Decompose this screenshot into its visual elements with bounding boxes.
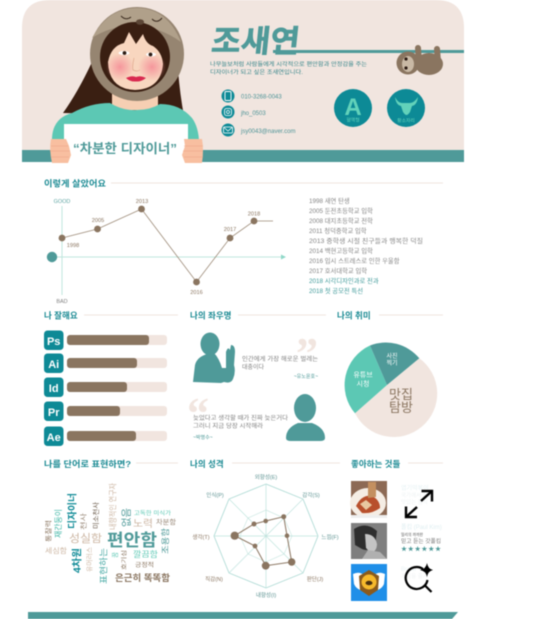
chart: word cloud: 편안함 (107, 531, 157, 550)
quote 2: ~박명수~ (193, 434, 213, 441)
chart: life line graph: 1998 (67, 243, 79, 249)
chart: word cloud: 노력 (133, 518, 153, 530)
skill: After Effects: Ae (47, 432, 61, 444)
heading: hobbies (337, 310, 443, 320)
chart: life line graph: GOOD (54, 199, 70, 205)
quote 2 (187, 389, 325, 441)
icon: sparkle search (406, 563, 433, 592)
quote 1: 대충이다 (242, 363, 265, 371)
chart: word cloud: 조용함 (161, 527, 170, 554)
chart: life line graph: 2005 (92, 218, 104, 224)
chart: life line graph: 2016 (190, 290, 203, 296)
chart: hobbies pie (345, 343, 437, 437)
text block: chronology list: 2017 호서대학교 입학 (309, 266, 367, 275)
text block: chronology list: 2018 시각디자인과로 전과 (309, 276, 379, 285)
quote 2: “ (187, 389, 209, 438)
text block: chronology list (309, 196, 423, 295)
chart: word cloud: 디자이너 (66, 493, 78, 529)
chart: word cloud: 표현하는 (98, 548, 108, 584)
chart: hobbies pie: 탐방 (389, 400, 413, 415)
favourite 3: hidden caption (401, 567, 428, 580)
heading: personality: 나의 성격 (190, 459, 224, 469)
chart: hobbies pie: 유튜브 (353, 371, 373, 379)
favourite 3: hidden caption: Brawl (401, 567, 416, 573)
chart: word cloud: 고독한 미식가 (134, 509, 171, 517)
favourite 2: caption: 폴킴 (Paul Kim) (401, 523, 442, 531)
chart: software skill bars (44, 330, 167, 446)
icon: person silhouette (286, 394, 325, 441)
intro text: 나무늘보처럼 사람들에게 시각적으로 편안함과 안정감을 주는 (210, 60, 367, 68)
heading: skills: 나 잘해요 (44, 310, 78, 320)
chart: life line graph (47, 199, 286, 305)
heading: life graph: 이렇게 살았어요 (44, 178, 106, 188)
chart: personality radar: 인식(P) (206, 491, 224, 499)
text block: chronology list: 1998 새연 탄생 (309, 196, 350, 205)
chart: word cloud: 재간둥이 (53, 509, 63, 538)
favourite 2: caption: ★★★★★★ (401, 546, 441, 553)
chart: word cloud: 미소천사 (91, 502, 100, 529)
heading: hobbies: 나의 취미 (337, 310, 371, 320)
chart: personality radar: 생각(T) (192, 533, 210, 541)
skill: Premiere: Pr (48, 407, 60, 419)
icon: hanging sloth (396, 48, 443, 75)
chart: word cloud: 내향적인 연구자 (108, 482, 118, 530)
instagram handle: jho_0503 (240, 111, 266, 117)
chart: word cloud: 없음 (120, 508, 133, 527)
chart: life line graph: 2013 (136, 199, 148, 205)
favourite 2: caption (401, 523, 442, 553)
favourite 1: food photo (350, 481, 387, 518)
text block: chronology list: 2018 첫 공모전 특선 (309, 286, 363, 295)
chart: word cloud: 유머러스 (84, 547, 94, 572)
heading: words (44, 459, 178, 469)
chart: word cloud: 긍정적 (135, 562, 154, 569)
chart: hobbies pie: 사진 (386, 352, 398, 360)
heading: favourites: 좋아하는 것들 (351, 459, 400, 469)
icon: expand arrows (406, 491, 432, 517)
chart: personality radar: 외향성(E) (255, 473, 277, 481)
panel: header background (22, 0, 464, 162)
favourite 3: game badge (351, 564, 387, 601)
name title: 조새연 (210, 24, 301, 59)
text block: chronology list: 2008 대지초등학교 전학 (309, 216, 373, 225)
text block: chronology list: 2005 둔전초등학교 입학 (309, 206, 373, 215)
text block: chronology list: 2014 백현고등학교 입학 (309, 246, 373, 255)
intro text: 디자이너가 되고 싶은 조새연입니다. (210, 68, 303, 76)
badge: blood type (334, 89, 372, 127)
illustration: portrait in sloth hood holding a sign (50, 7, 203, 163)
footer bar (28, 612, 458, 619)
favourite 2: portrait photo (351, 523, 387, 559)
chart: word cloud: 성실함 (69, 532, 102, 545)
chart: personality radar: 직감(N) (205, 576, 223, 583)
icon: mail (222, 124, 234, 136)
icon: instagram (222, 106, 234, 118)
heading: favourites (351, 459, 443, 469)
email: jsy0043@naver.com (240, 129, 295, 135)
heading: motto (190, 310, 326, 320)
chart: life line graph: 2018 (248, 212, 260, 218)
skill: Photoshop: Ps (47, 336, 60, 348)
badge: zodiac taurus (387, 89, 425, 127)
chart: hobbies pie: 시청 (357, 380, 369, 388)
chart: word cloud: 깔끔함 (133, 550, 159, 559)
icon: person with raised hand (193, 332, 235, 383)
icon: phone (222, 90, 234, 102)
heading: words: 나를 단어로 표현하면? (44, 459, 131, 469)
chart: word cloud: 천사 (78, 513, 88, 530)
chart: personality radar (192, 473, 339, 599)
text block: chronology list: 2013 중학생 시절 친구들과 행복한 덕질 (309, 236, 423, 245)
badge: blood type: 혈액형 (346, 116, 360, 124)
chart: word cloud: 통찰력 (44, 520, 52, 542)
chart: word cloud (44, 482, 176, 584)
quote 2: 늦었다고 생각할 때가 진짜 늦은거다 (193, 414, 289, 422)
badge: blood type: A (344, 94, 362, 121)
chart: word cloud: 꿈 (111, 552, 119, 558)
name title (210, 24, 464, 59)
quote 1 (193, 329, 319, 383)
quote 1: ” (296, 329, 318, 378)
chart: hobbies pie: 찍기 (386, 359, 398, 367)
favourite 1: hidden caption: 엽기떡볶이 (401, 484, 429, 492)
chart: word cloud: 4차원 (70, 548, 84, 573)
phone number: 010-3268-0043 (241, 94, 282, 100)
skill: Illustrator: Ai (48, 359, 59, 371)
chart: personality radar: 감각(S) (302, 492, 320, 499)
favourite 1: hidden caption: 국가에서 지원 (401, 491, 433, 499)
illustration: portrait in sloth hood holding a sign: “차분한 디자이너” (73, 141, 177, 156)
chart: personality radar: 판단(J) (307, 575, 323, 583)
contact list (222, 90, 295, 136)
text block: chronology list: 2011 청덕중학교 입학 (309, 226, 367, 235)
heading: motto: 나의 좌우명 (190, 310, 231, 320)
favourite 1: hidden caption: 맛있는 음식 (401, 498, 428, 506)
skill: InDesign: Id (49, 383, 59, 395)
favourite 2: caption: 믿고 듣는 갓폴킴 (401, 537, 441, 545)
chart: word cloud: 호기심 (120, 550, 128, 570)
quote 2: 그러니 지금 당장 시작해라 (193, 422, 263, 430)
heading: skills (44, 310, 178, 320)
chart: word cloud: 차분함 (156, 517, 176, 526)
chart: word cloud: 세심함 (45, 546, 68, 555)
chart: word cloud: 은근히 똑똑함 (115, 572, 171, 583)
favourite 2: caption: 밀리의 까까한 (401, 532, 424, 537)
badge: zodiac taurus: 황소자리 (397, 117, 415, 124)
quote 1: 인간에게 가장 해로운 벌레는 (242, 355, 319, 363)
chart: hobbies pie: 맛집 (389, 387, 413, 402)
chart: life line graph: BAD (56, 299, 68, 305)
chart: personality radar: 느낌(F) (321, 534, 339, 541)
chart: personality radar: 내향성(I) (256, 591, 276, 599)
intro text (210, 60, 367, 76)
quote 1: ~유노윤호~ (294, 374, 318, 380)
chart: life line graph: 2017 (224, 227, 236, 233)
favourite 3: hidden caption: 게임을 즐겨 (401, 572, 428, 580)
favourite 1: hidden caption (401, 484, 433, 506)
text block: chronology list: 2016 입시 스트레스로 인한 우울함 (309, 256, 400, 265)
